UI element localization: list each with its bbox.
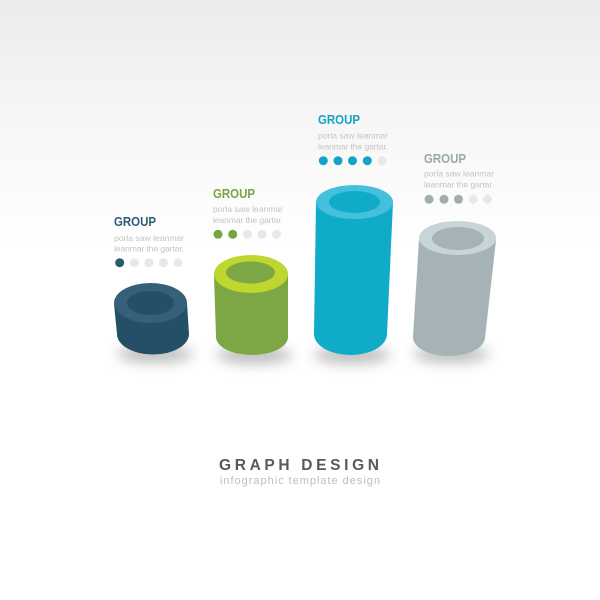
- label block: grey group: leanmar the gartar.: [424, 180, 494, 190]
- label block: grey group: [424, 151, 494, 190]
- shadow: grey cylinder: [413, 345, 489, 363]
- cylinder: blue: [314, 185, 393, 355]
- cylinder: grey: [413, 221, 496, 356]
- label block: navy group: leanmar the gartar.: [114, 244, 184, 254]
- title: GRAPH DESIGN: [219, 457, 379, 474]
- cylinder group 4: grey: [413, 151, 496, 363]
- rating dots: grey, 3 of 5: [424, 195, 492, 204]
- rating dots: navy, 1 of 5: [115, 258, 182, 267]
- label block: green group: [213, 186, 283, 225]
- label block: green group: leanmar the gartar.: [213, 215, 283, 225]
- label block: grey group: porla saw leanmar: [424, 168, 494, 178]
- label block: grey group: GROUP: [424, 151, 466, 166]
- label block: navy group: [114, 214, 184, 254]
- cylinder: green: [214, 255, 288, 355]
- label block: navy group: GROUP: [114, 214, 156, 229]
- label block: blue group: leanmar the gartar.: [318, 142, 388, 152]
- rating dots: green, 2 of 5: [214, 230, 281, 239]
- rating dots: blue, 4 of 5: [319, 156, 386, 165]
- shadow: green cylinder: [216, 346, 292, 364]
- cylinder group 3: blue: [314, 112, 393, 364]
- background gradient: [0, 0, 600, 250]
- cylinder: navy: [114, 283, 189, 354]
- label block: green group: porla saw leanmar: [213, 204, 283, 214]
- label block: blue group: GROUP: [318, 112, 360, 127]
- label block: blue group: [318, 112, 388, 152]
- cylinder group 1: navy: [114, 214, 193, 363]
- label block: navy group: porla saw leanmar: [114, 233, 184, 243]
- label block: green group: GROUP: [213, 186, 255, 201]
- shadow: blue cylinder: [314, 346, 390, 364]
- label block: blue group: porla saw leanmar: [318, 130, 388, 140]
- cylinder group 2: green: [213, 186, 292, 364]
- shadow: navy cylinder: [117, 345, 193, 363]
- subtitle: infographic template design: [220, 475, 380, 487]
